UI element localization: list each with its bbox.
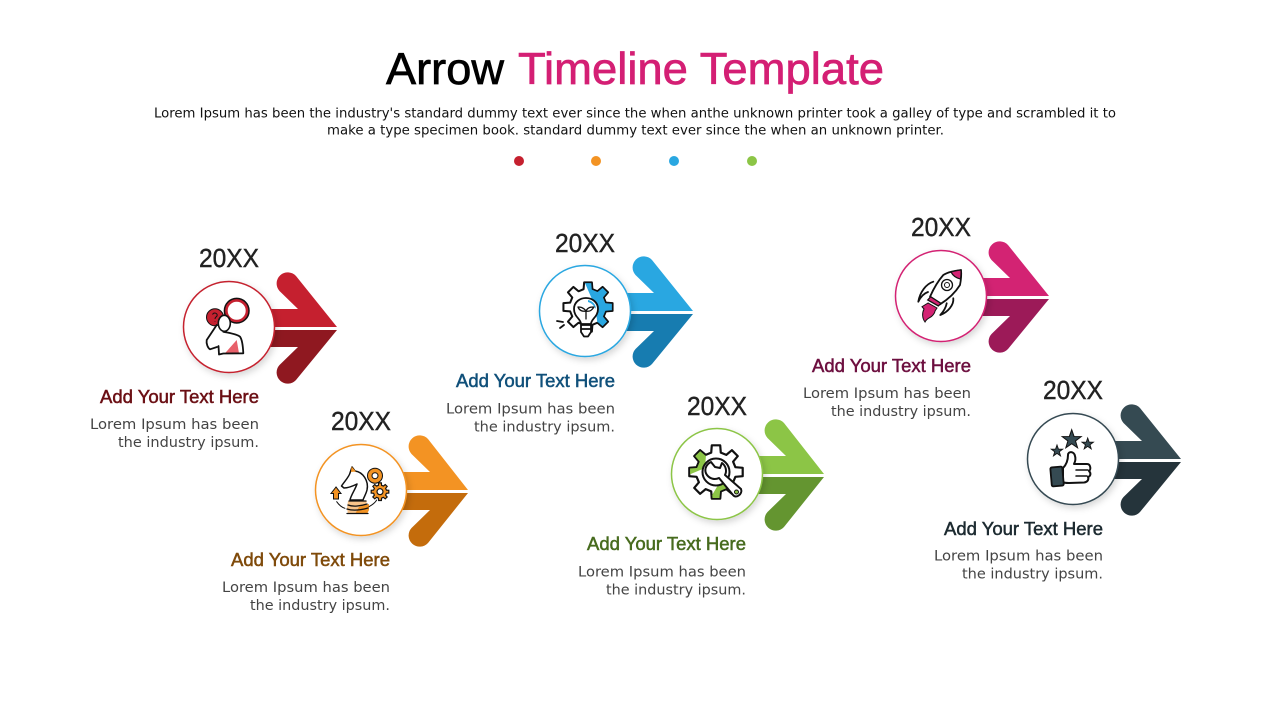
- description: the industry ipsum.: [474, 420, 615, 436]
- arrow: [391, 435, 468, 547]
- step 1: red: [90, 243, 337, 451]
- description: Lorem Ipsum has been: [934, 548, 1103, 564]
- decorative colour dots: [514, 156, 757, 166]
- description: Lorem Ipsum has been: [803, 386, 971, 402]
- description: Lorem Ipsum has been: [90, 417, 259, 433]
- arrow: [971, 241, 1049, 353]
- year label: 20XX: [199, 243, 259, 273]
- description: the industry ipsum.: [962, 566, 1103, 582]
- description: the industry ipsum.: [118, 435, 259, 451]
- step 2: orange: [222, 406, 468, 614]
- heading: Add Your Text Here: [456, 371, 615, 391]
- year label: 20XX: [687, 391, 747, 421]
- year label: 20XX: [555, 228, 615, 258]
- description: the industry ipsum.: [250, 598, 390, 614]
- intro paragraph: [154, 106, 1116, 138]
- icon circle with thumbs up and stars: [1028, 414, 1118, 504]
- heading: Add Your Text Here: [231, 550, 390, 570]
- description: the industry ipsum.: [606, 582, 746, 598]
- description: [222, 580, 390, 614]
- description: [578, 564, 746, 598]
- year label: 20XX: [331, 406, 391, 436]
- step 3: blue: [446, 228, 693, 436]
- description: the industry ipsum.: [831, 404, 971, 420]
- arrow: [747, 419, 824, 531]
- heading: Add Your Text Here: [587, 534, 746, 554]
- description: [803, 386, 971, 420]
- step 5: pink: [803, 212, 1049, 420]
- intro paragraph: Lorem Ipsum has been the industry's standard dummy text ever since the when anthe unknown printer took a galley of type and scrambled it to: [154, 106, 1116, 122]
- title: Timeline Template: [518, 45, 884, 94]
- step 4: green: [578, 391, 824, 598]
- icon circle with thinker: [184, 282, 274, 372]
- icon circle with chess knight: [316, 444, 406, 536]
- icon circle with rocket: [896, 250, 986, 342]
- heading: Add Your Text Here: [944, 519, 1103, 539]
- description: Lorem Ipsum has been: [222, 580, 390, 596]
- description: [90, 417, 259, 451]
- intro paragraph: make a type specimen book. standard dummy text ever since the when an unknown printer.: [327, 122, 944, 138]
- arrow: [259, 272, 337, 384]
- description: Lorem Ipsum has been: [578, 564, 746, 580]
- step 6: dark slate: [934, 375, 1181, 582]
- heading: Add Your Text Here: [812, 356, 971, 376]
- arrow: [615, 256, 693, 368]
- description: [446, 402, 615, 436]
- icon circle with lightbulb gear: [540, 266, 630, 356]
- description: Lorem Ipsum has been: [446, 402, 615, 418]
- year label: 20XX: [911, 212, 971, 242]
- year label: 20XX: [1043, 375, 1103, 405]
- description: [934, 548, 1103, 582]
- heading: Add Your Text Here: [100, 387, 259, 407]
- icon circle with wrench gear: [672, 428, 762, 520]
- arrow: [1103, 404, 1181, 516]
- title: Arrow: [386, 45, 505, 94]
